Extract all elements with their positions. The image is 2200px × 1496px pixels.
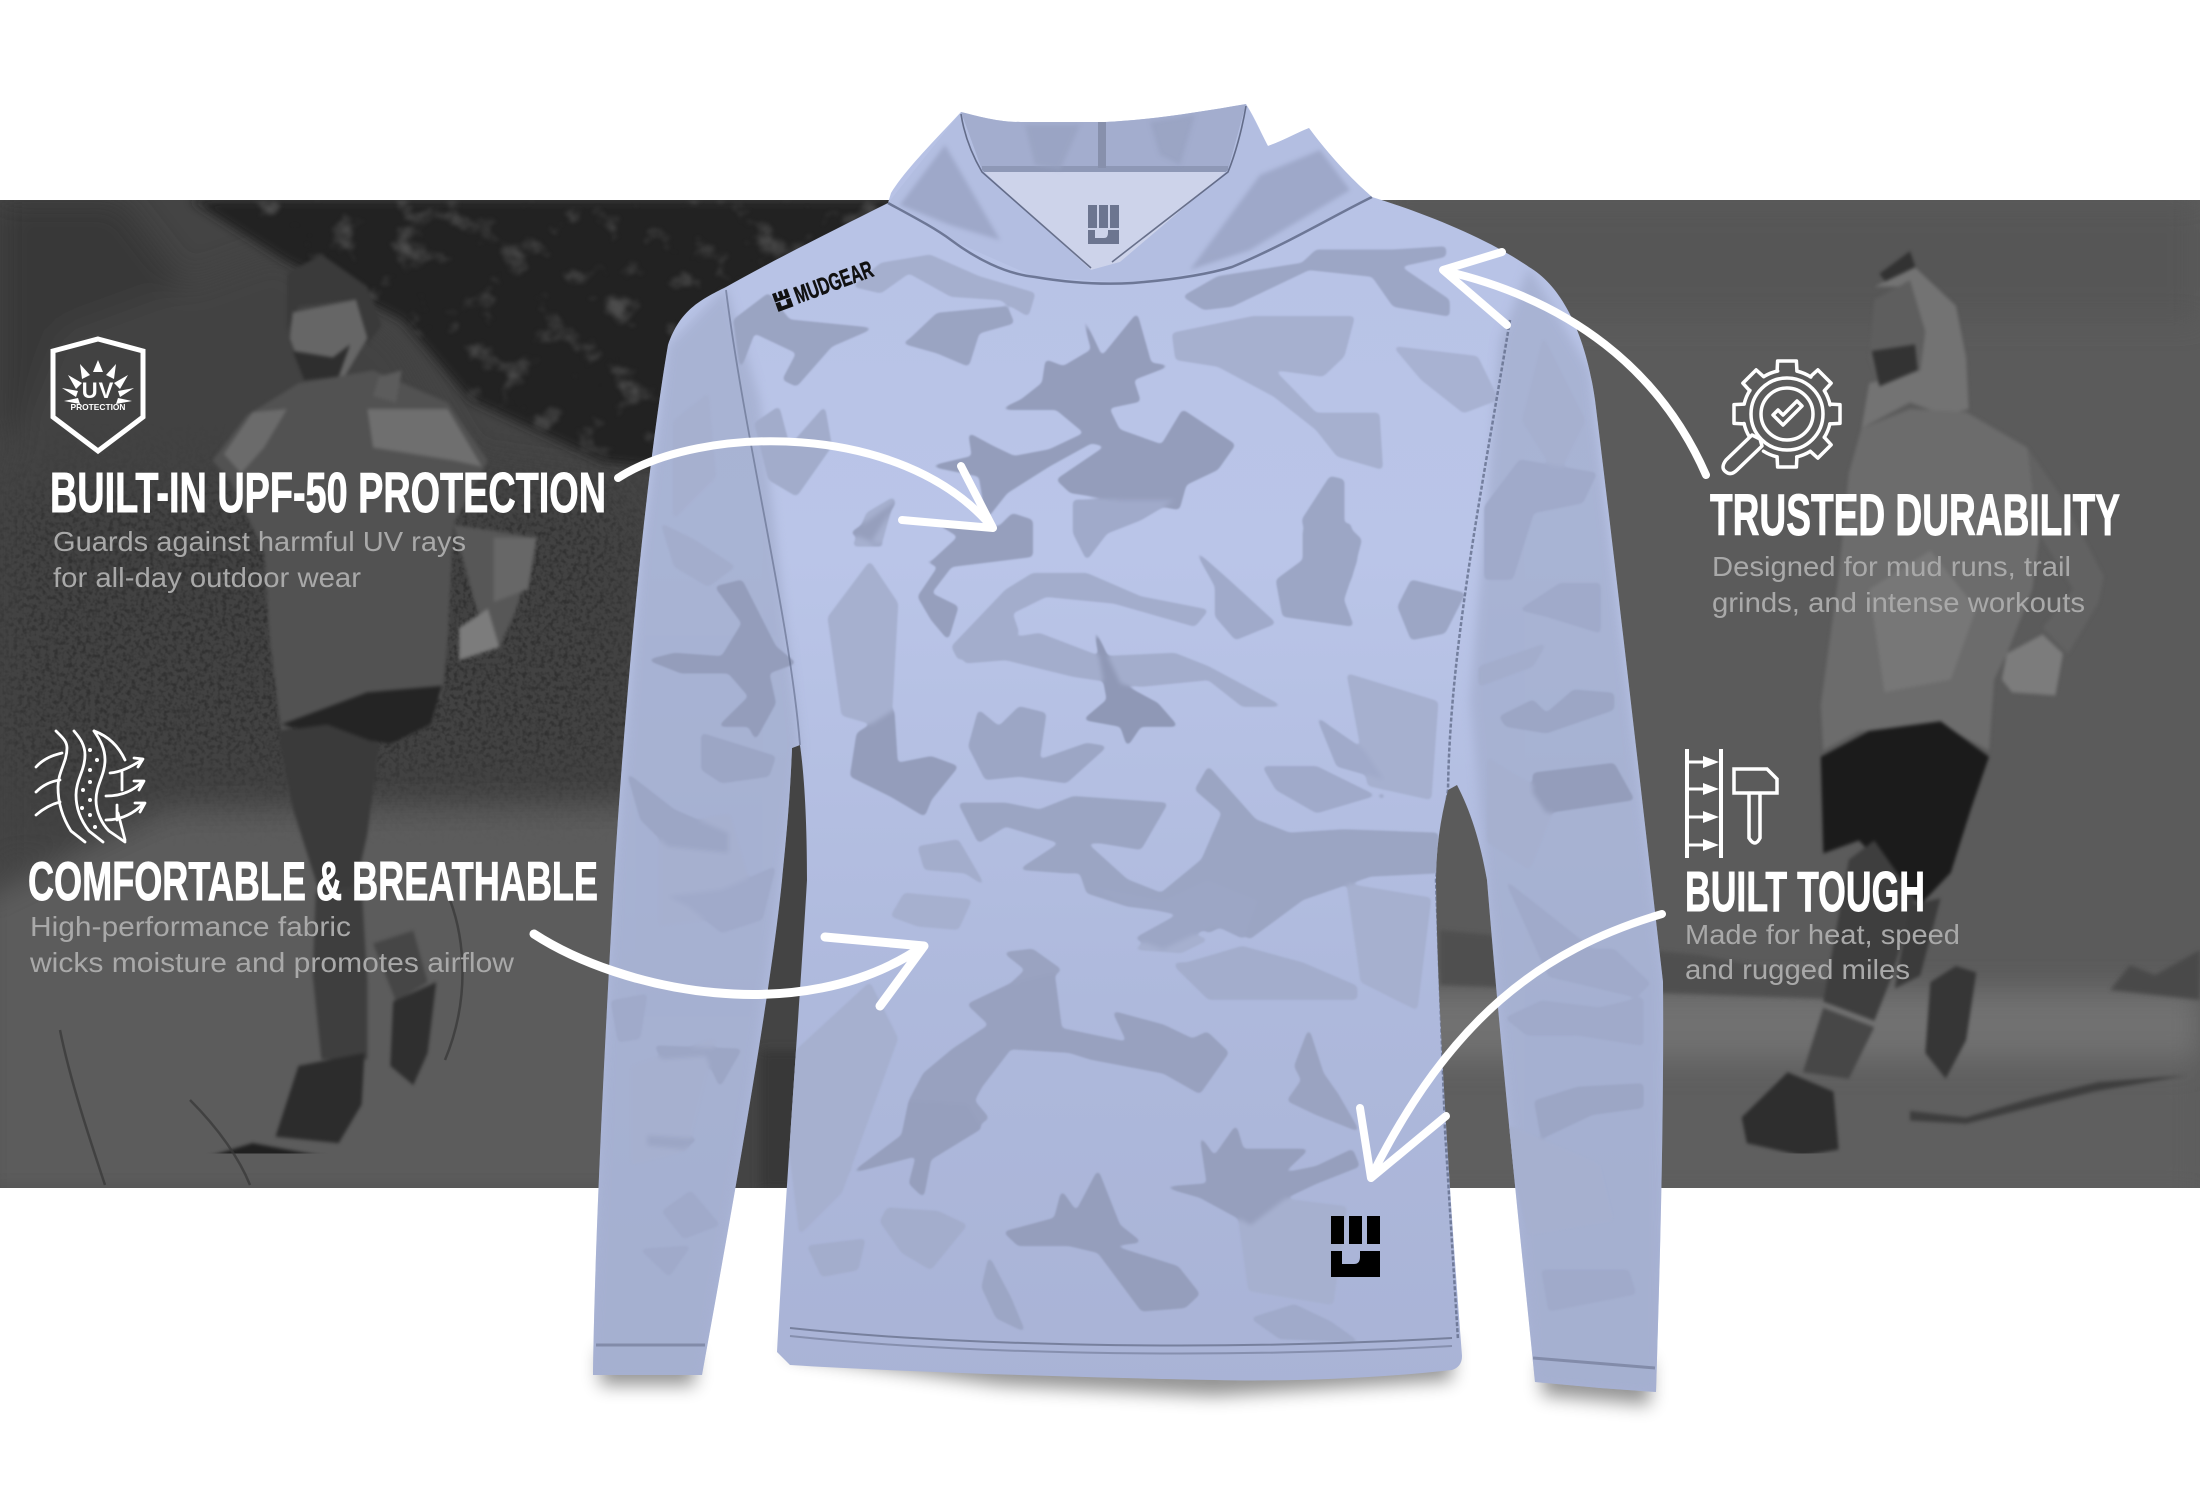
text: UPF-50 description	[53, 526, 466, 593]
icon: UV protection shield: UV	[82, 378, 114, 403]
text: breathable description: High-performance fabric	[30, 911, 351, 942]
camo pattern	[611, 246, 1650, 1342]
panel: right photo band with runner	[1380, 200, 2200, 1198]
sleeves shade	[590, 287, 800, 1380]
arrow: built tough to hem	[1360, 914, 1662, 1178]
heading: UPF-50: BUILT-IN UPF-50 PROTECTION	[50, 461, 606, 525]
shirt drop shadow	[600, 1340, 1650, 1405]
logo: shoulder MUDGEAR wordmark	[771, 256, 877, 317]
filler camo patches	[789, 563, 1552, 1302]
text: durability description: grinds, and intense workouts	[1712, 587, 2085, 618]
arrow: UPF-50 to chest	[618, 441, 993, 528]
text: built tough description	[1685, 919, 1960, 985]
middle camo traced on body and sleeves	[627, 500, 1634, 1000]
runner left	[212, 255, 538, 1154]
arrow: durability to shoulder	[1443, 252, 1706, 475]
text: durability description	[1712, 551, 2085, 618]
upper camo traced on chest	[733, 246, 1597, 580]
text: breathable description	[29, 911, 515, 978]
lower camo traced on hem and cuffs	[611, 880, 1650, 1342]
text: built tough description: Made for heat, speed	[1685, 919, 1960, 950]
hood inner	[961, 104, 1246, 170]
text: built tough description: and rugged miles	[1685, 954, 1910, 985]
icon: breathable fabric layers	[36, 731, 145, 842]
logo: collar label mark	[1088, 205, 1119, 244]
text: UPF-50 description: Guards against harmful UV rays	[53, 526, 466, 557]
panel: left photo band with runner	[0, 200, 889, 1188]
icon: gear with magnifier and check	[1723, 361, 1840, 474]
stitching	[790, 1328, 1452, 1345]
runner right	[1742, 251, 2185, 1156]
icon: UV protection shield: PROTECTION	[70, 402, 126, 412]
logo: shoulder MUDGEAR wordmark: MUDGEAR	[791, 256, 877, 309]
text: durability description: Designed for mud runs, trail	[1712, 551, 2071, 582]
arrow: breathable to body	[534, 934, 924, 1006]
heading: built tough: BUILT TOUGH	[1685, 860, 1925, 924]
text: UPF-50 description: for all-day outdoor wear	[53, 562, 361, 593]
icon: hammer and impact wall	[1687, 749, 1777, 858]
product: hooded camo long-sleeve shirt	[590, 104, 1663, 1395]
heading: breathable: COMFORTABLE & BREATHABLE	[28, 850, 598, 912]
logo: hem mark	[1331, 1216, 1380, 1277]
icon: UV protection shield	[53, 339, 143, 451]
text: breathable description: wicks moisture and promotes airflow	[29, 947, 515, 978]
